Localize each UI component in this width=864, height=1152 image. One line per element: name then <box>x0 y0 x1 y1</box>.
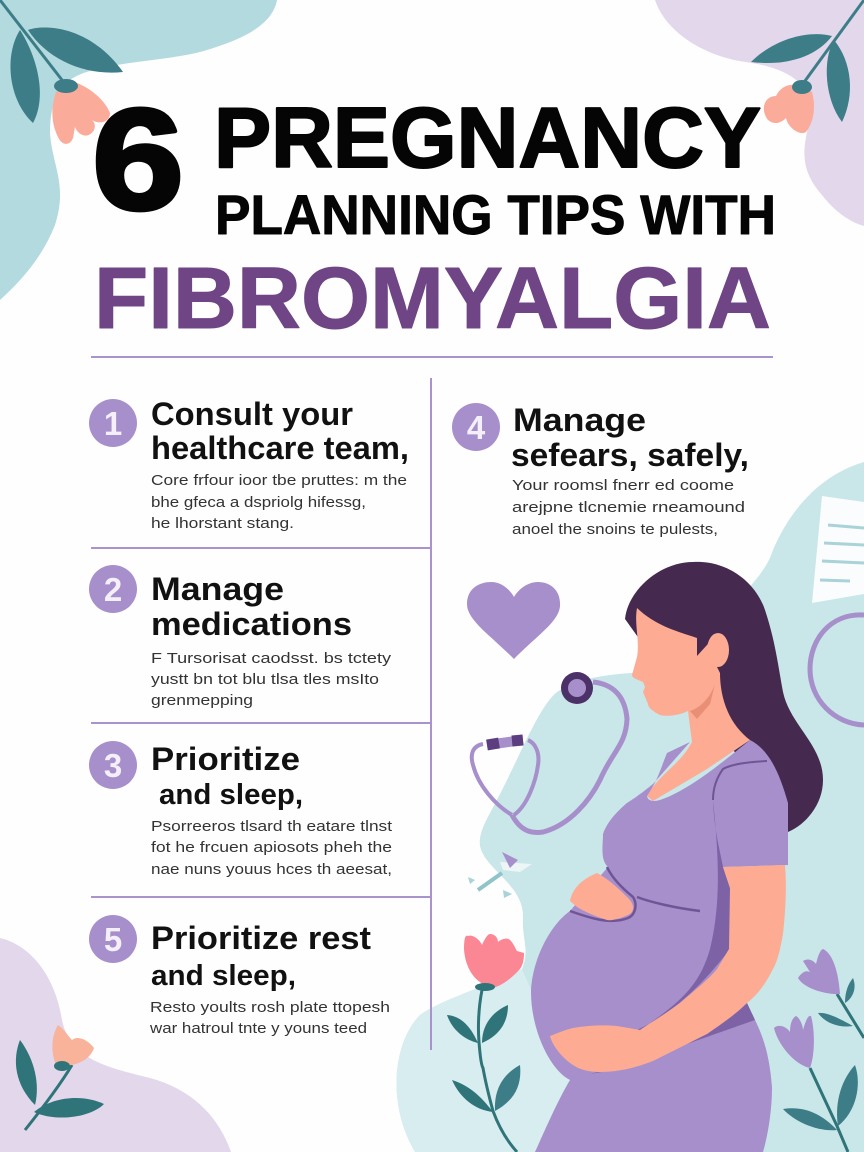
upper hand <box>570 873 633 920</box>
tip 2 <box>89 565 392 709</box>
title: PREGNANCY: PREGNANCY <box>214 91 761 186</box>
tip 1: healthcare team, <box>151 430 409 466</box>
illustration: pregnant woman <box>531 562 823 1152</box>
belly crease <box>570 867 700 921</box>
tip 4: Your roomsl fnerr ed coome <box>512 477 734 494</box>
icon: ring <box>810 615 864 725</box>
sleeve seam <box>713 761 767 800</box>
tip 2: yustt bn tot blu tlsa tles msIto <box>151 671 379 688</box>
tip 2: medications <box>151 606 352 642</box>
dress <box>531 740 788 1152</box>
tip 3: 3 <box>104 747 122 784</box>
floral: bottom left <box>16 1025 104 1130</box>
hair <box>625 562 823 832</box>
tip 4: Manage <box>513 402 646 438</box>
tip 3: Psorreeros tlsard th eatare tlnst <box>151 818 393 835</box>
tip 4 <box>452 402 749 538</box>
ear <box>707 633 729 667</box>
tip 3: nae nuns youus hces th aeesat, <box>151 861 392 878</box>
icon: heart <box>467 582 560 659</box>
tip 4: sefears, safely, <box>511 437 749 473</box>
tip 1: 1 <box>104 405 122 442</box>
title: 6: 6 <box>92 79 184 240</box>
tip 1: Consult your <box>151 396 353 432</box>
icon: stethoscope <box>472 672 627 832</box>
tip 2: grenmepping <box>151 692 253 709</box>
tip 2: F Tursorisat caodsst. bs tctety <box>151 650 392 667</box>
floral: bottom right <box>774 949 864 1152</box>
title: PLANNING TIPS WITH: PLANNING TIPS WITH <box>215 183 776 246</box>
arm and lower hand <box>550 865 786 1072</box>
tip 3: Prioritize <box>151 741 300 777</box>
title: FIBROMYALGIA: FIBROMYALGIA <box>94 250 771 347</box>
tip 4: anoel the snoins te pulests, <box>512 521 718 538</box>
floral: top left <box>0 0 123 144</box>
tip 1 <box>89 396 409 532</box>
dividers <box>91 357 773 1050</box>
tip 1: he lhorstant stang. <box>151 515 294 532</box>
tip 5: Resto yoults rosh plate ttopesh <box>150 999 390 1016</box>
blob: top right <box>655 0 864 226</box>
neck shadow <box>690 684 715 719</box>
tip 5: 5 <box>104 921 122 958</box>
tip 1: bhe gfeca a dspriolg hifessg, <box>151 494 366 511</box>
tip 5 <box>89 915 390 1037</box>
tip 5: Prioritize rest <box>151 920 371 956</box>
small floating bits <box>468 852 532 898</box>
blob: bottom right <box>396 462 864 1152</box>
tip 2: 2 <box>104 571 122 608</box>
tip 2: Manage <box>151 571 284 607</box>
tip 4: arejpne tlcnemie rneamound <box>512 499 745 516</box>
tip 5: war hatroul tnte y youns teed <box>149 1020 367 1037</box>
floral: bottom centre <box>447 934 524 1152</box>
floral: top right <box>751 0 864 133</box>
dress shading <box>637 800 730 1030</box>
tip 3 <box>89 741 393 878</box>
blob: top left <box>0 0 277 300</box>
icon: document <box>812 496 864 603</box>
tip 5: and sleep, <box>151 960 296 992</box>
tip 3: and sleep, <box>159 779 303 811</box>
blob: lower lighter area <box>396 969 570 1152</box>
blob: bottom left <box>0 938 231 1152</box>
tip 4: 4 <box>467 409 486 446</box>
tip 3: fot he frcuen apiosots pheh the <box>151 839 392 856</box>
tip 1: Core frfour ioor tbe pruttes: m the <box>151 472 407 489</box>
face and neck <box>632 608 750 801</box>
